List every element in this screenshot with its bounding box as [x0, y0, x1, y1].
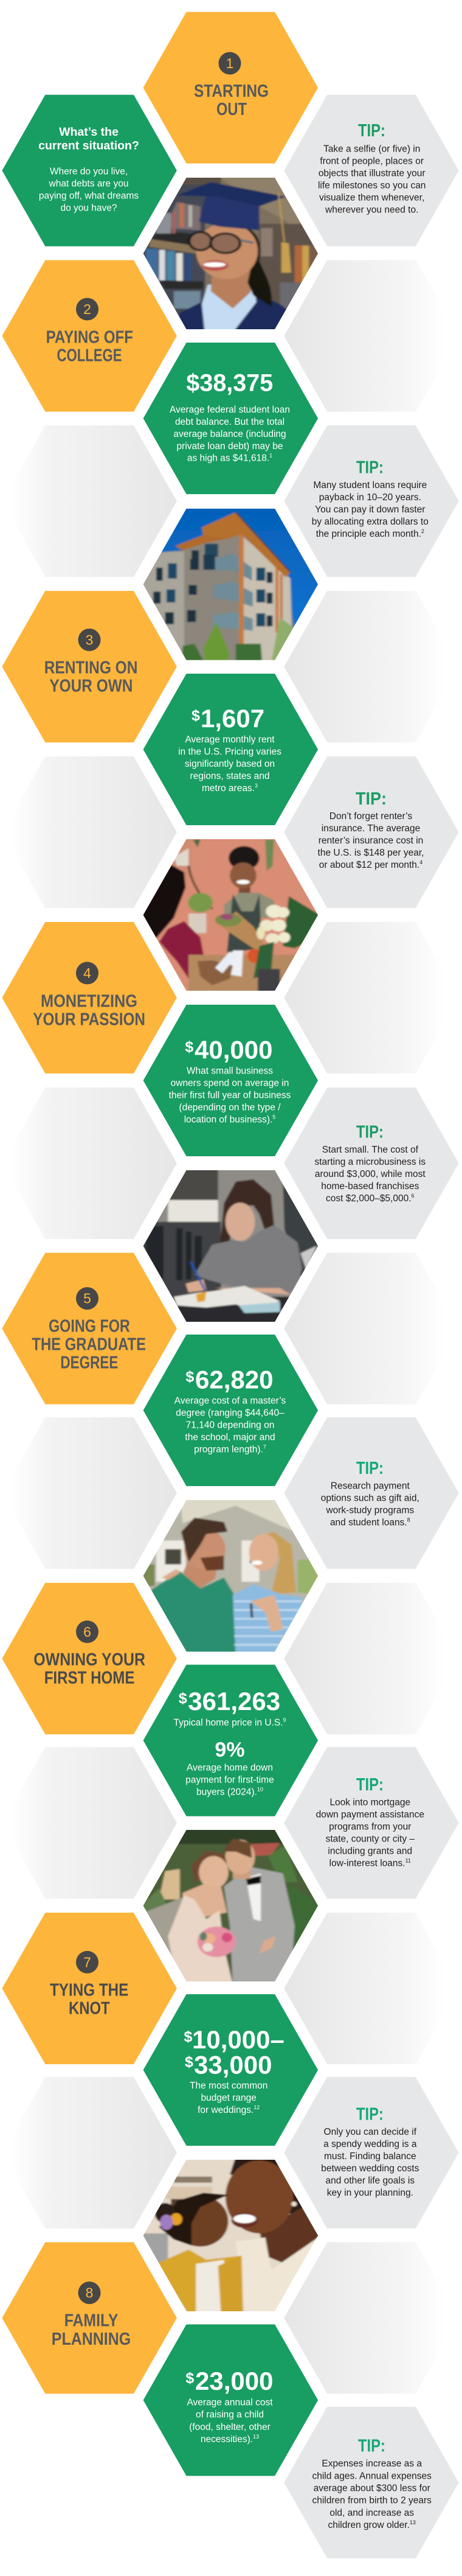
stat: $62,820: $ [185, 1368, 194, 1385]
stat: $10,000–$33,000: 10,000– [192, 2025, 284, 2054]
text block: raising a child copy: necessities). [201, 2434, 253, 2445]
text block: tip 7 copy: a spendy wedding is a [323, 2139, 417, 2149]
text block: rent copy: regions, states and [190, 771, 269, 781]
text block: small business copy [169, 1066, 291, 1125]
icon: step number 4: 4 [83, 965, 91, 981]
heading: starting out: STARTING [194, 82, 269, 101]
text block: raising a child copy: 13 [253, 2434, 259, 2440]
panel: tip 2 [284, 425, 459, 577]
text block: rent copy: in the U.S. Pricing varies [178, 747, 281, 757]
heading: tip: TIP: [356, 1459, 384, 1478]
text block: small business copy: location of business). [184, 1114, 272, 1125]
text block: student debt copy: as high as $41,618. [187, 453, 269, 464]
panel: tip 4 [284, 1087, 459, 1239]
text block: tip 4 copy: around $3,000, while most [315, 1169, 426, 1179]
text block: tip 7 copy: between wedding costs [321, 2163, 419, 2174]
photo: apartment building [139, 504, 324, 663]
text block: master's degree copy: 7 [263, 1443, 266, 1450]
photo: mother and child [139, 2156, 324, 2314]
panel: tip 6 [284, 1747, 459, 1899]
text block: tip 4 copy: starting a microbusiness is [314, 1157, 426, 1167]
panel: current situation question [2, 95, 177, 246]
text block: tip 2 copy: by allocating extra dollars to [312, 517, 429, 527]
text block: typical home price: 9 [283, 1717, 286, 1723]
text block: wedding budget copy: budget range [201, 2093, 257, 2103]
heading: tying the knot [50, 1980, 128, 2018]
panel: step 7 tying the knot [2, 1913, 177, 2064]
text block: tip 5 copy: work-study programs [325, 1505, 414, 1515]
text block: tip 7 copy: Only you can decide if [324, 2127, 417, 2137]
text block: tip 1 copy [318, 144, 426, 215]
text block: tip 4 copy [314, 1145, 426, 1204]
text block: wedding budget copy: 12 [253, 2104, 260, 2110]
stat: $40,000: $ [185, 1039, 193, 1056]
text block: master's degree copy: program length). [194, 1444, 263, 1454]
heading: tip: TIP: [358, 2437, 385, 2456]
text block: rent copy: 3 [255, 783, 258, 789]
text block: raising a child copy: of raising a child [196, 2410, 264, 2420]
stat: $10,000–$33,000: $ [185, 2054, 193, 2071]
text block: tip 2 copy: the principle each month. [316, 529, 421, 539]
text block: tip 2 copy: Many student loans require [313, 480, 427, 490]
icon: step number 5: 5 [83, 1291, 91, 1307]
text block: down payment copy: Average home down [187, 1762, 273, 1773]
icon: step number 6: 6 [83, 1624, 91, 1639]
heading: tip: TIP: [356, 2104, 384, 2124]
heading: family planning [52, 2311, 131, 2349]
text block: typical home price: Typical home price in U.S. [173, 1717, 283, 1728]
text block: tip 4 copy: Start small. The cost of [322, 1145, 419, 1155]
stat: $361,263: 361,263 [188, 1687, 280, 1716]
heading: tying the knot: KNOT [69, 1998, 110, 2018]
text block: situation questions: paying off, what dreams [39, 190, 139, 201]
text block: tip 5 copy: and student loans. [330, 1517, 407, 1527]
icon: step number 8: 8 [86, 2285, 93, 2301]
heading: what's the current situation: What’s the [59, 125, 119, 139]
heading: tip: TIP: [356, 789, 387, 809]
text block: tip 8 copy: child ages. Annual expenses [312, 2471, 432, 2481]
text block: student debt copy: Average federal student loan [170, 405, 290, 415]
icon: step number 3 [78, 629, 101, 651]
panel: step 5 going for the graduate degree [2, 1253, 177, 1405]
text block: master's degree copy: Average cost of a master’s [174, 1395, 286, 1406]
text block: tip 7 copy: and other life goals is [326, 2176, 415, 2186]
text block: tip 8 copy: children grow older. [328, 2520, 410, 2530]
text block: tip 8 copy [312, 2459, 432, 2530]
text block: tip 6 copy [316, 1797, 424, 1868]
icon: step number 7: 7 [83, 1954, 91, 1970]
text block: tip 2 copy: payback in 10–20 years. [319, 492, 421, 503]
text block: tip 1 copy: visualize them whenever, [319, 192, 424, 203]
panel: tip 3 [284, 756, 459, 908]
heading: starting out: OUT [216, 100, 247, 119]
panel: tip 8 [284, 2407, 459, 2558]
icon: step number 2: 2 [83, 301, 91, 317]
text block: down payment copy: buyers (2024). [196, 1787, 257, 1797]
stat: $38,375: $38,375 [186, 370, 273, 397]
panel: home price stats [143, 1665, 318, 1816]
text block: student debt copy: debt balance. But the total [175, 417, 284, 427]
panel: tip 1 [284, 95, 459, 246]
panel: tip 7 [284, 2077, 459, 2229]
text block: situation questions [39, 166, 139, 213]
stat: $10,000–$33,000: 33,000 [194, 2051, 272, 2079]
heading: tip: TIP: [356, 1775, 384, 1795]
text block: master's degree copy: the school, major and [185, 1432, 275, 1442]
text block: tip 4 copy: home-based franchises [321, 1181, 419, 1192]
text block: raising a child copy: Average annual cost [187, 2398, 273, 2407]
panel: cost of raising a child stat [143, 2325, 318, 2476]
text block: tip 1 copy: wherever you need to. [325, 204, 418, 215]
text block: tip 5 copy: Research payment [331, 1481, 410, 1491]
text block: situation questions: do you have? [60, 203, 117, 213]
text block: small business copy: 5 [272, 1114, 275, 1120]
text block: tip 8 copy: 13 [410, 2519, 416, 2525]
heading: going for the graduate degree: GOING FOR [49, 1317, 130, 1336]
heading: monetizing your passion: YOUR PASSION [33, 1010, 145, 1029]
text block: tip 7 copy: must. Finding balance [324, 2151, 416, 2162]
heading: starting out [194, 82, 269, 119]
panel: small business stat [143, 1005, 318, 1156]
text block: tip 5 copy: options such as gift aid, [321, 1493, 419, 1503]
panel: master's degree stat [143, 1335, 318, 1486]
heading: owning your first home: FIRST HOME [44, 1668, 135, 1688]
icon: step number 5 [76, 1287, 98, 1310]
text block: tip 8 copy: children from birth to 2 years [312, 2496, 432, 2506]
panel: wedding budget stat [143, 1994, 318, 2146]
photo: florist with customer [143, 839, 318, 991]
heading: renting on your own [44, 658, 137, 696]
panel: rent stat [143, 674, 318, 825]
text block: small business copy: What small business [187, 1066, 273, 1076]
text block: tip 3 copy [318, 811, 424, 870]
text block: rent copy: metro areas. [202, 783, 255, 794]
panel: step 4 monetizing your passion [2, 922, 177, 1073]
heading: paying off college: PAYING OFF [46, 328, 133, 347]
text block: wedding budget copy: for weddings. [198, 2105, 253, 2115]
photo: graduate in cap and gown [143, 178, 318, 329]
heading: tip: TIP: [358, 121, 385, 141]
heading: renting on your own: YOUR OWN [49, 676, 133, 696]
text block: rent copy [178, 735, 281, 794]
text block: tip 3 copy: the U.S. is $148 per year, [318, 848, 424, 858]
text block: tip 7 copy: key in your planning. [327, 2188, 413, 2198]
icon: step number 8 [78, 2281, 101, 2304]
text block: tip 2 copy [312, 480, 429, 539]
panel: step 6 owning your first home [2, 1583, 177, 1734]
text block: master's degree copy: degree (ranging $44,640– [176, 1408, 284, 1418]
text block: down payment copy [185, 1762, 274, 1797]
text block: rent copy: significantly based on [185, 759, 275, 769]
photo: woman studying at a desk [143, 1170, 318, 1322]
text block: small business copy: (depending on the type / [179, 1102, 281, 1112]
text block: rent copy: Average monthly rent [185, 735, 275, 745]
heading: tying the knot: TYING THE [50, 1980, 128, 2000]
text block: tip 3 copy: renter’s insurance cost in [319, 836, 423, 846]
text block: small business copy: owners spend on average in [171, 1078, 289, 1088]
text block: tip 7 copy [321, 2127, 419, 2198]
text block: wedding budget copy: The most common [190, 2081, 267, 2091]
text block: raising a child copy [187, 2398, 273, 2445]
icon: step number 7 [76, 1951, 98, 1974]
icon: step number 1: 1 [226, 55, 233, 71]
text block: tip 6 copy: 11 [405, 1857, 411, 1863]
text block: tip 1 copy: life milestones so you can [318, 180, 426, 190]
heading: family planning: PLANNING [52, 2330, 131, 2349]
heading: what's the current situation: current situation? [38, 139, 139, 153]
text block: tip 1 copy: Take a selfie (or five) in [323, 144, 420, 154]
stat: $1,607: 1,607 [201, 704, 264, 733]
photo: couple holding house keys [143, 1500, 318, 1652]
text block: tip 2 copy: 2 [421, 528, 424, 534]
text block: tip 6 copy: including grants and [328, 1846, 412, 1856]
heading: owning your first home: OWNING YOUR [33, 1650, 145, 1669]
text block: down payment copy: 10 [257, 1786, 263, 1792]
text block: tip 4 copy: cost $2,000–$5,000. [326, 1193, 412, 1204]
text block: student debt copy: private loan debt) may be [177, 441, 283, 452]
heading: paying off college: COLLEGE [57, 346, 122, 366]
heading: tip: TIP: [356, 1122, 384, 1142]
stat: $1,607: $ [191, 707, 200, 724]
icon: step number 3: 3 [86, 632, 93, 647]
stat: $23,000: $ [185, 2370, 194, 2387]
text block: tip 5 copy [321, 1481, 419, 1527]
text block: tip 1 copy: objects that illustrate your [319, 168, 426, 178]
heading: family planning: FAMILY [64, 2311, 118, 2330]
text block: tip 6 copy: programs from your [329, 1821, 411, 1832]
panel: step 3 renting on your own [2, 591, 177, 742]
text block: tip 8 copy: Expenses increase as a [322, 2459, 422, 2469]
heading: paying off college [46, 328, 133, 366]
text block: student debt copy: 1 [269, 453, 272, 459]
text block: student debt copy: average balance (including [173, 429, 286, 439]
text block: tip 6 copy: down payment assistance [316, 1809, 424, 1820]
heading: going for the graduate degree: THE GRADUATE [32, 1335, 146, 1355]
heading: owning your first home [33, 1650, 145, 1688]
stat: $23,000: 23,000 [195, 2367, 273, 2395]
icon: step number 4 [76, 962, 98, 985]
stat: 9%: 9% [215, 1738, 245, 1761]
heading: what's the current situation [38, 125, 139, 153]
heading: going for the graduate degree [32, 1317, 146, 1373]
text block: tip 8 copy: average about $300 less for [314, 2483, 430, 2494]
text block: tip 6 copy: low-interest loans. [329, 1858, 405, 1868]
stat: $40,000: 40,000 [195, 1036, 272, 1064]
text block: situation questions: Where do you live, [50, 166, 128, 176]
panel: step 1 starting out [143, 12, 318, 164]
text block: down payment copy: payment for first-time [185, 1775, 274, 1785]
text block: tip 6 copy: Look into mortgage [329, 1797, 410, 1807]
icon: step number 2 [76, 298, 98, 320]
icon: step number 1 [219, 52, 241, 74]
text block: tip 2 copy: You can pay it down faster [315, 504, 425, 515]
text block: master's degree copy: 71,140 depending on [186, 1420, 274, 1430]
heading: tip: TIP: [356, 458, 384, 477]
panel: step 2 paying off college [2, 260, 177, 411]
text block: tip 8 copy: old, and increase as [329, 2508, 414, 2518]
text block: tip 1 copy: front of people, places or [320, 156, 424, 166]
heading: monetizing your passion [33, 991, 145, 1029]
text block: small business copy: their first full year of business [169, 1090, 291, 1100]
stat: $10,000–$33,000 [184, 2025, 284, 2079]
stat: $62,820: 62,820 [195, 1365, 273, 1394]
text block: wedding budget copy [190, 2081, 267, 2115]
icon: step number 6 [76, 1621, 98, 1643]
panel: student debt stat [143, 343, 318, 494]
stat: $361,263: $ [179, 1690, 187, 1707]
text block: master's degree copy [174, 1395, 286, 1454]
panel: step 8 family planning [2, 2242, 177, 2394]
text block: tip 6 copy: state, county or city – [326, 1834, 415, 1844]
text block: tip 3 copy: 4 [419, 859, 422, 865]
heading: going for the graduate degree: DEGREE [60, 1353, 118, 1373]
text block: tip 3 copy: or about $12 per month. [319, 860, 419, 870]
heading: renting on your own: RENTING ON [44, 658, 137, 677]
text block: tip 4 copy: 6 [412, 1193, 415, 1199]
text block: tip 5 copy: 8 [407, 1517, 410, 1523]
text block: raising a child copy: (food, shelter, other [189, 2422, 271, 2432]
panel: tip 5 [284, 1417, 459, 1569]
text block: tip 3 copy: Don’t forget renter’s [329, 811, 412, 822]
text block: tip 3 copy: insurance. The average [322, 823, 420, 834]
text block: situation questions: what debts are you [49, 178, 128, 189]
heading: monetizing your passion: MONETIZING [41, 991, 137, 1011]
text block: student debt copy [170, 405, 290, 464]
stat: $10,000–$33,000: $ [184, 2028, 192, 2045]
photo: wedding couple [143, 1830, 318, 1981]
